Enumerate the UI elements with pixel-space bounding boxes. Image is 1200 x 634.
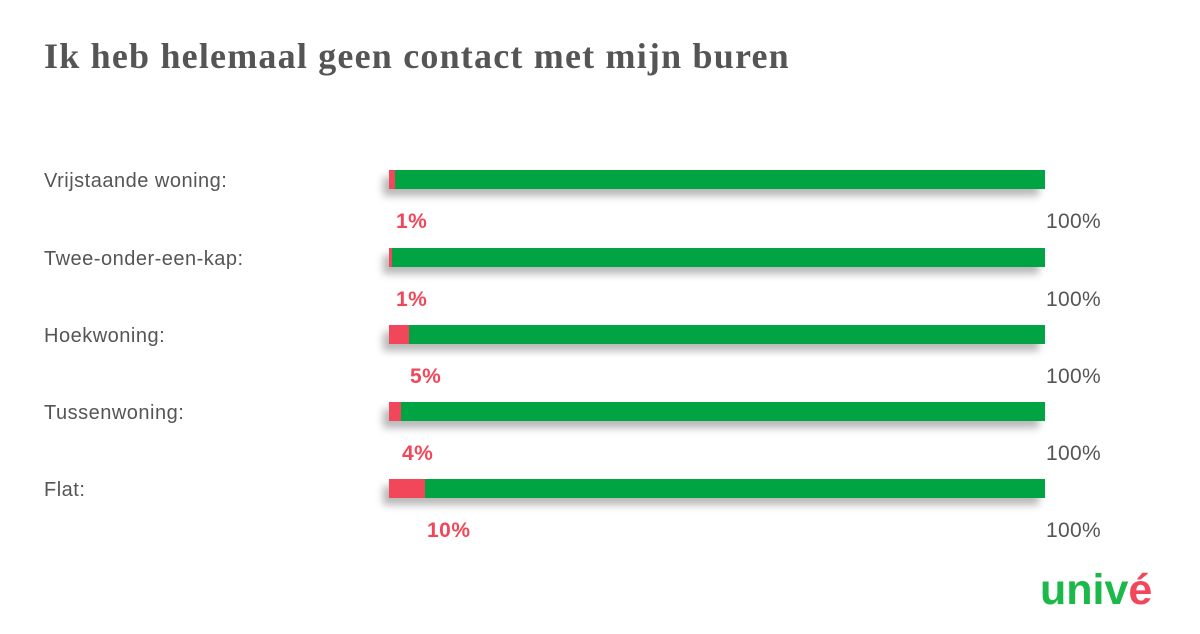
row: Tussenwoning: 100% [1046, 442, 1101, 465]
row: Twee-onder-een-kap [44, 248, 1101, 311]
row: Tussenwoning: 4% [402, 442, 433, 465]
row: Vrijstaande woning: 100% [1046, 210, 1101, 233]
row: Flat: Flat: [44, 479, 85, 501]
row: Flat: 10% [427, 519, 471, 542]
row: Tussenwoning: Tussenwoning: [44, 402, 184, 424]
row: Twee-onder-een-kap: 100% [1046, 288, 1101, 311]
row: Hoekwoning: 100% [1046, 365, 1101, 388]
row: Hoekwoning: 5% [410, 365, 441, 388]
row: Twee-onder-een-kap: 1% [396, 288, 427, 311]
row: Vrijstaande woning: Vrijstaande woning: [44, 170, 227, 192]
row: Twee-onder-een-kap: Twee-onder-een-kap: [44, 248, 244, 270]
row: Vrijstaande woning [44, 170, 1101, 233]
logo: univé [1040, 566, 1152, 614]
title: Ik heb helemaal geen contact met mijn buren [44, 36, 790, 76]
row: Vrijstaande woning: 1% [396, 210, 427, 233]
row: Flat: 100% [1046, 519, 1101, 542]
row: Hoekwoning [44, 325, 1101, 388]
row: Hoekwoning: Hoekwoning: [44, 325, 165, 347]
row: Flat [44, 479, 1101, 542]
row: Tussenwoning [44, 402, 1101, 465]
